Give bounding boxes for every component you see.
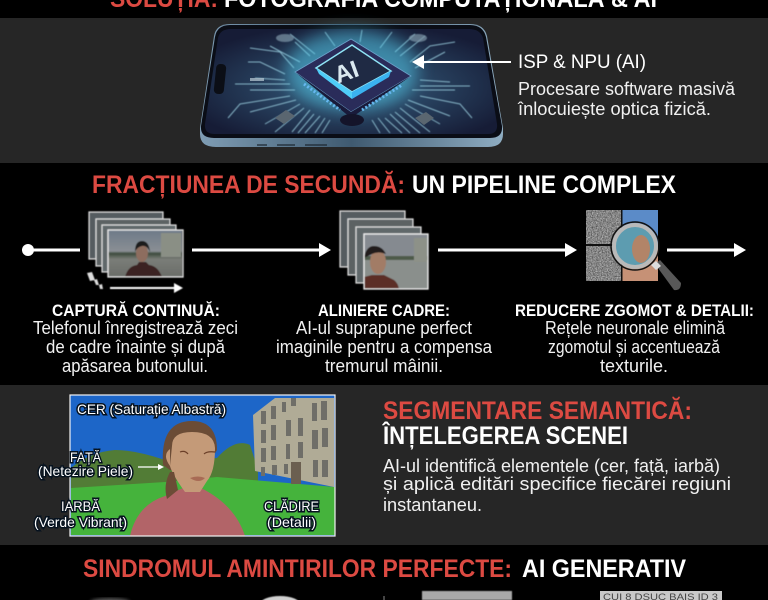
building	[253, 398, 334, 487]
text: ISP & NPU: ISP & NPU (AI)	[518, 52, 646, 73]
text: step 2	[276, 302, 493, 376]
panel: segmented scene: CLĂDIRE	[264, 498, 319, 514]
icon: phone with AI chip	[200, 24, 503, 147]
title: pipeline: UN PIPELINE COMPLEX	[412, 171, 676, 199]
icon: phone with AI chip: AI	[331, 56, 362, 89]
text: step 1: Telefonul înregistrează zeci	[33, 318, 238, 338]
text: ISP & NPU: Procesare software masivă	[518, 79, 736, 99]
text: step 1	[33, 301, 238, 376]
text: step 3	[515, 302, 754, 376]
panel: segmented scene: (Netezire Piele)	[38, 463, 133, 479]
arrow: step 2 to 3	[438, 243, 577, 257]
title: generative AI: AI GENERATIV	[522, 555, 686, 583]
text: step 2: tremurul mâinii.	[325, 356, 443, 376]
side notch	[213, 64, 227, 94]
text: step 3: zgomotul și accentuează	[548, 337, 721, 357]
text: step 3: Rețele neuronale elimină	[545, 318, 726, 338]
text: step 2: AI-ul suprapune perfect	[296, 318, 472, 338]
text: step 1: CAPTURĂ CONTINUĂ:	[52, 301, 220, 320]
icon: noise reduction magnifier	[586, 210, 681, 290]
title: pipeline: FRACȚIUNEA DE SECUNDĂ:	[92, 170, 405, 199]
heading: semantic segmentation: SEGMENTARE SEMANTICĂ:	[383, 396, 692, 425]
text: segmentation body: instantaneu.	[383, 495, 482, 515]
text: ISP & NPU	[517, 52, 736, 119]
text: ISP & NPU: înlocuiește optica fizică.	[517, 99, 711, 119]
bottom image previews	[90, 591, 722, 600]
arrow: step 1 to 2	[192, 243, 331, 257]
text: segmentation body	[383, 456, 731, 515]
panel: segmented scene: (Verde Vibrant)	[34, 514, 127, 530]
glow	[286, 30, 418, 110]
labels on scene: CER (Saturație Albastră)	[77, 401, 226, 417]
text: step 2: imaginile pentru a compensa	[276, 337, 493, 357]
text: step 3: REDUCERE ZGOMOT & DETALII:	[515, 302, 754, 320]
chip	[295, 39, 411, 112]
text: segmentation body: AI-ul identifică elementele (cer, față, iarbă)	[383, 456, 720, 476]
icon: aligned frames	[340, 211, 428, 289]
panel: segmented scene: FAȚĂ	[70, 449, 102, 465]
title: pipeline	[92, 170, 676, 199]
panel: segmented scene: IARBĂ	[61, 498, 101, 514]
text: step 3: texturile.	[600, 356, 668, 376]
text: step 1: de cadre înainte și după	[46, 337, 226, 357]
pipeline start dot	[22, 244, 80, 256]
title: generative AI: SINDROMUL AMINTIRILOR PERFECTE:	[83, 555, 512, 583]
heading: semantic segmentation	[381, 396, 692, 450]
arrow: to chip	[412, 55, 511, 69]
person	[163, 421, 217, 470]
heading: semantic segmentation: ÎNȚELEGEREA SCENEI	[381, 420, 628, 450]
text: segmentation body: și aplică editări specifice fiecărei regiuni	[383, 474, 731, 494]
side buttons	[257, 144, 327, 146]
small components	[275, 110, 434, 125]
arrow: pipeline end	[667, 243, 746, 257]
circuit traces	[228, 30, 472, 133]
text: step 2: ALINIERE CADRE:	[318, 302, 450, 320]
panel: segmented scene	[34, 395, 335, 536]
icon: burst frames	[87, 212, 183, 293]
text: step 1: apăsarea butonului.	[62, 356, 208, 376]
panel: segmented scene: (Detalii)	[267, 514, 316, 530]
